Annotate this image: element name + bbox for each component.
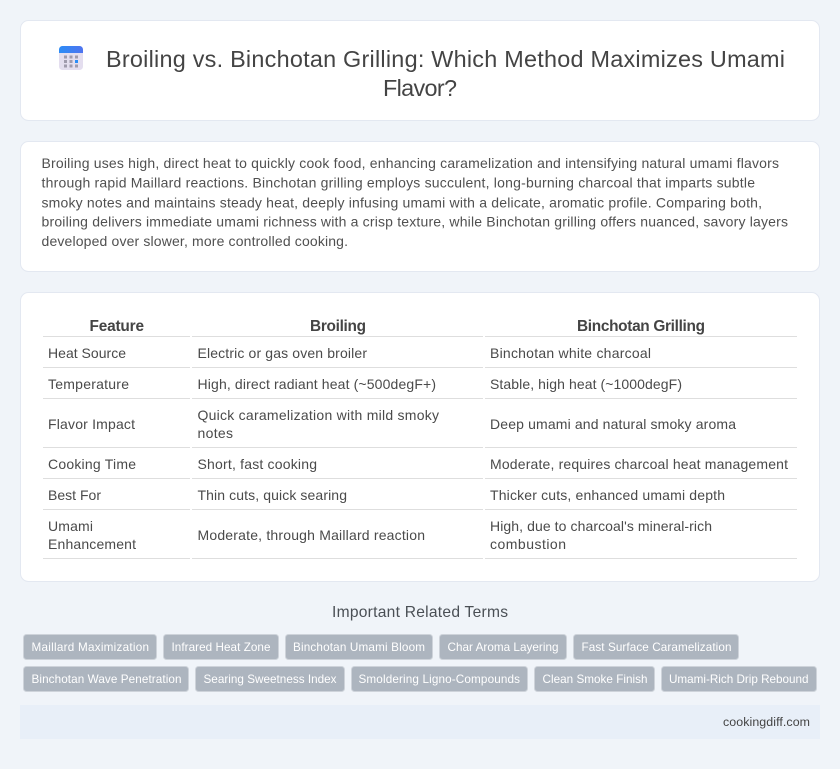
row: umami enhancement: Umami	[48, 518, 93, 534]
tags: related terms: Binchotan Umami Bloom	[293, 641, 425, 654]
panel: summary text: broiling delivers immediate umami richness with a crisp texture, while Binchotan grilling offers nuanced, savory layers	[42, 214, 788, 230]
panel: title card	[20, 20, 820, 120]
row: umami enhancement	[48, 518, 712, 552]
row: best for	[48, 487, 725, 503]
row: heat source: Heat Source	[48, 345, 126, 361]
row: temperature: Temperature	[48, 376, 129, 392]
row: temperature: High, direct radiant heat (~500degF+)	[198, 376, 436, 392]
panel: summary text	[20, 142, 820, 272]
row: flavor impact	[48, 407, 736, 441]
row: heat source	[48, 345, 651, 361]
tags: related terms: Smoldering Ligno-Compounds	[358, 673, 520, 686]
title: Flavor?	[383, 75, 457, 101]
tags: related terms: Maillard Maximization	[32, 641, 149, 654]
footer bar	[20, 705, 820, 739]
row: umami enhancement: Enhancement	[48, 536, 136, 552]
row: heat source: Binchotan white charcoal	[490, 345, 651, 361]
panel: summary text: developed over slower, more controlled cooking.	[42, 233, 348, 249]
row: flavor impact: notes	[198, 425, 233, 441]
tags: related terms	[24, 634, 816, 692]
row: best for: Thicker cuts, enhanced umami depth	[490, 487, 725, 503]
row: umami enhancement: Moderate, through Maillard reaction	[198, 527, 425, 543]
row: cooking time	[48, 456, 788, 472]
panel: summary text: through rapid Maillard reactions. Binchotan grilling employs succulent, long-burning charcoal that imparts subtle	[42, 174, 755, 190]
row: best for: Thin cuts, quick searing	[198, 487, 347, 503]
panel: comparison table	[20, 292, 820, 582]
row: umami enhancement: High, due to charcoal's mineral-rich	[490, 518, 712, 534]
table header: Feature	[90, 318, 144, 335]
tags: related terms: Umami-Rich Drip Rebound	[669, 673, 808, 686]
row: flavor impact: Deep umami and natural smoky aroma	[490, 416, 736, 432]
row: temperature: Stable, high heat (~1000degF)	[490, 376, 682, 392]
table header: Broiling	[310, 318, 366, 335]
tags: related terms: Searing Sweetness Index	[204, 673, 337, 686]
heading: related terms: Important Related Terms	[332, 604, 508, 621]
tags: related terms: Fast Surface Caramelization	[582, 641, 732, 654]
title: Broiling vs. Binchotan Grilling: Which Method Maximizes Umami	[106, 46, 785, 72]
panel: summary text: Broiling uses high, direct heat to quickly cook food, enhancing caramelization and intensifying natural umami flavors	[42, 155, 779, 171]
tags: related terms: Clean Smoke Finish	[542, 673, 648, 686]
tags: related terms: Binchotan Wave Penetration	[32, 673, 182, 686]
row: temperature	[48, 376, 682, 392]
icon: calendar	[59, 46, 83, 70]
row: heat source: Electric or gas oven broiler	[198, 345, 367, 361]
row: cooking time: Cooking Time	[48, 456, 136, 472]
table header: Binchotan Grilling	[577, 318, 705, 335]
row: cooking time: Short, fast cooking	[198, 456, 317, 472]
title	[106, 46, 785, 101]
row: cooking time: Moderate, requires charcoal heat management	[490, 456, 788, 472]
panel: summary text: smoky notes and maintains steady heat, deeply infusing umami with a delicate, aromatic profile. Comparing both,	[42, 194, 762, 210]
tags: related terms: Char Aroma Layering	[448, 641, 558, 654]
row: flavor impact: Quick caramelization with mild smoky	[198, 407, 439, 423]
row: flavor impact: Flavor Impact	[48, 416, 135, 432]
row: umami enhancement: combustion	[490, 536, 566, 552]
footer bar: cookingdiff.com	[723, 715, 810, 729]
tags: related terms: Infrared Heat Zone	[172, 641, 270, 654]
table header	[90, 318, 705, 335]
row: best for: Best For	[48, 487, 101, 503]
